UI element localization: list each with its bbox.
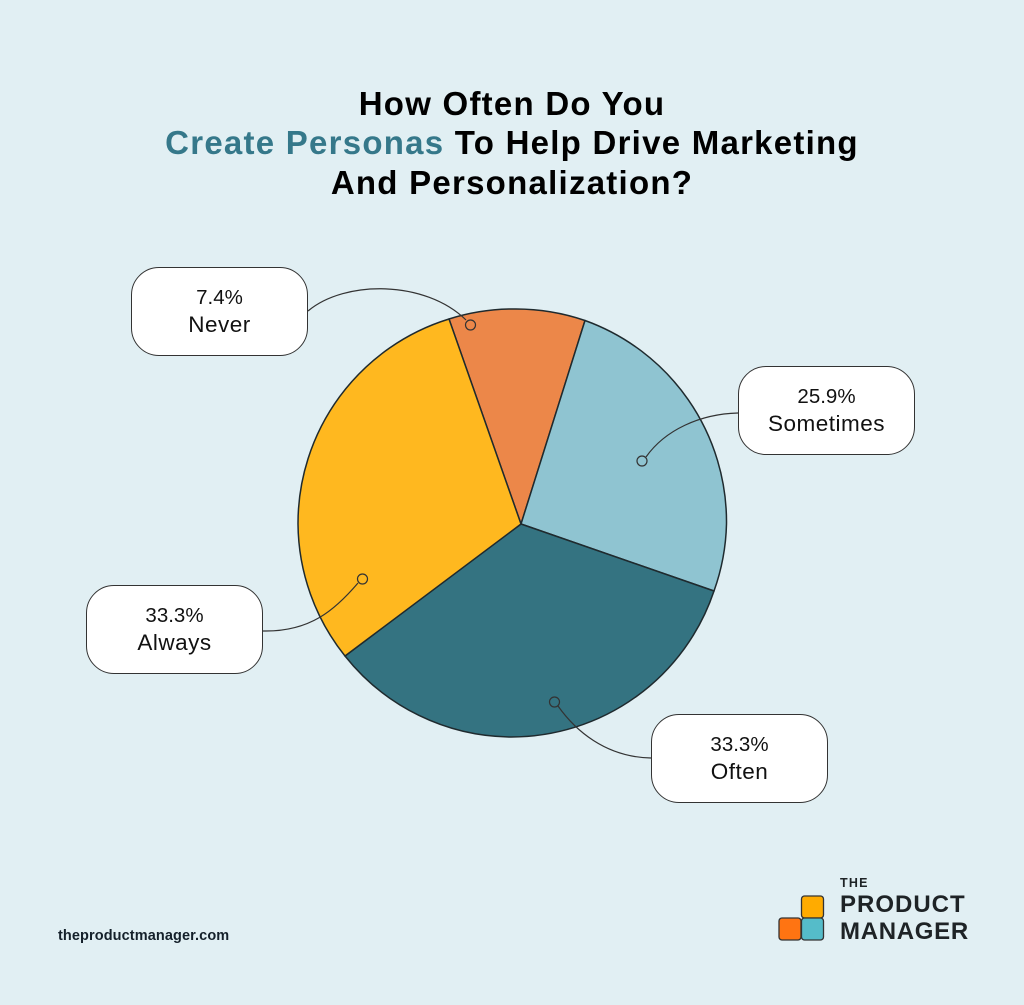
logo text: THE [840,876,869,890]
callout: always [86,585,263,674]
slice: often [345,524,714,737]
logo text: MANAGER [840,918,969,945]
callout: sometimes [738,366,915,455]
title: And Personalization? [331,164,693,201]
title [165,85,859,201]
callout: never: 7.4% [196,286,243,309]
connector lines and markers [263,289,738,758]
slice: never [449,309,585,524]
logo text: PRODUCT [840,891,966,918]
callout: always: Always [137,630,212,655]
callout: sometimes: Sometimes [768,411,885,436]
callout: sometimes: 25.9% [797,385,856,408]
callout: always: 33.3% [145,604,204,627]
callout: often: Often [711,759,768,784]
callout: often [651,714,828,803]
slice: always [298,319,521,656]
logo [778,876,969,945]
callout: never: Never [188,312,251,337]
callout: often: 33.3% [710,733,769,756]
title: Create Personas To Help Drive Marketing [165,124,859,161]
slice: sometimes [521,320,727,591]
logo icon [778,895,824,941]
logo text [840,876,969,945]
title: How Often Do You [359,85,665,122]
website: theproductmanager.com [58,928,229,944]
callout: never [131,267,308,356]
